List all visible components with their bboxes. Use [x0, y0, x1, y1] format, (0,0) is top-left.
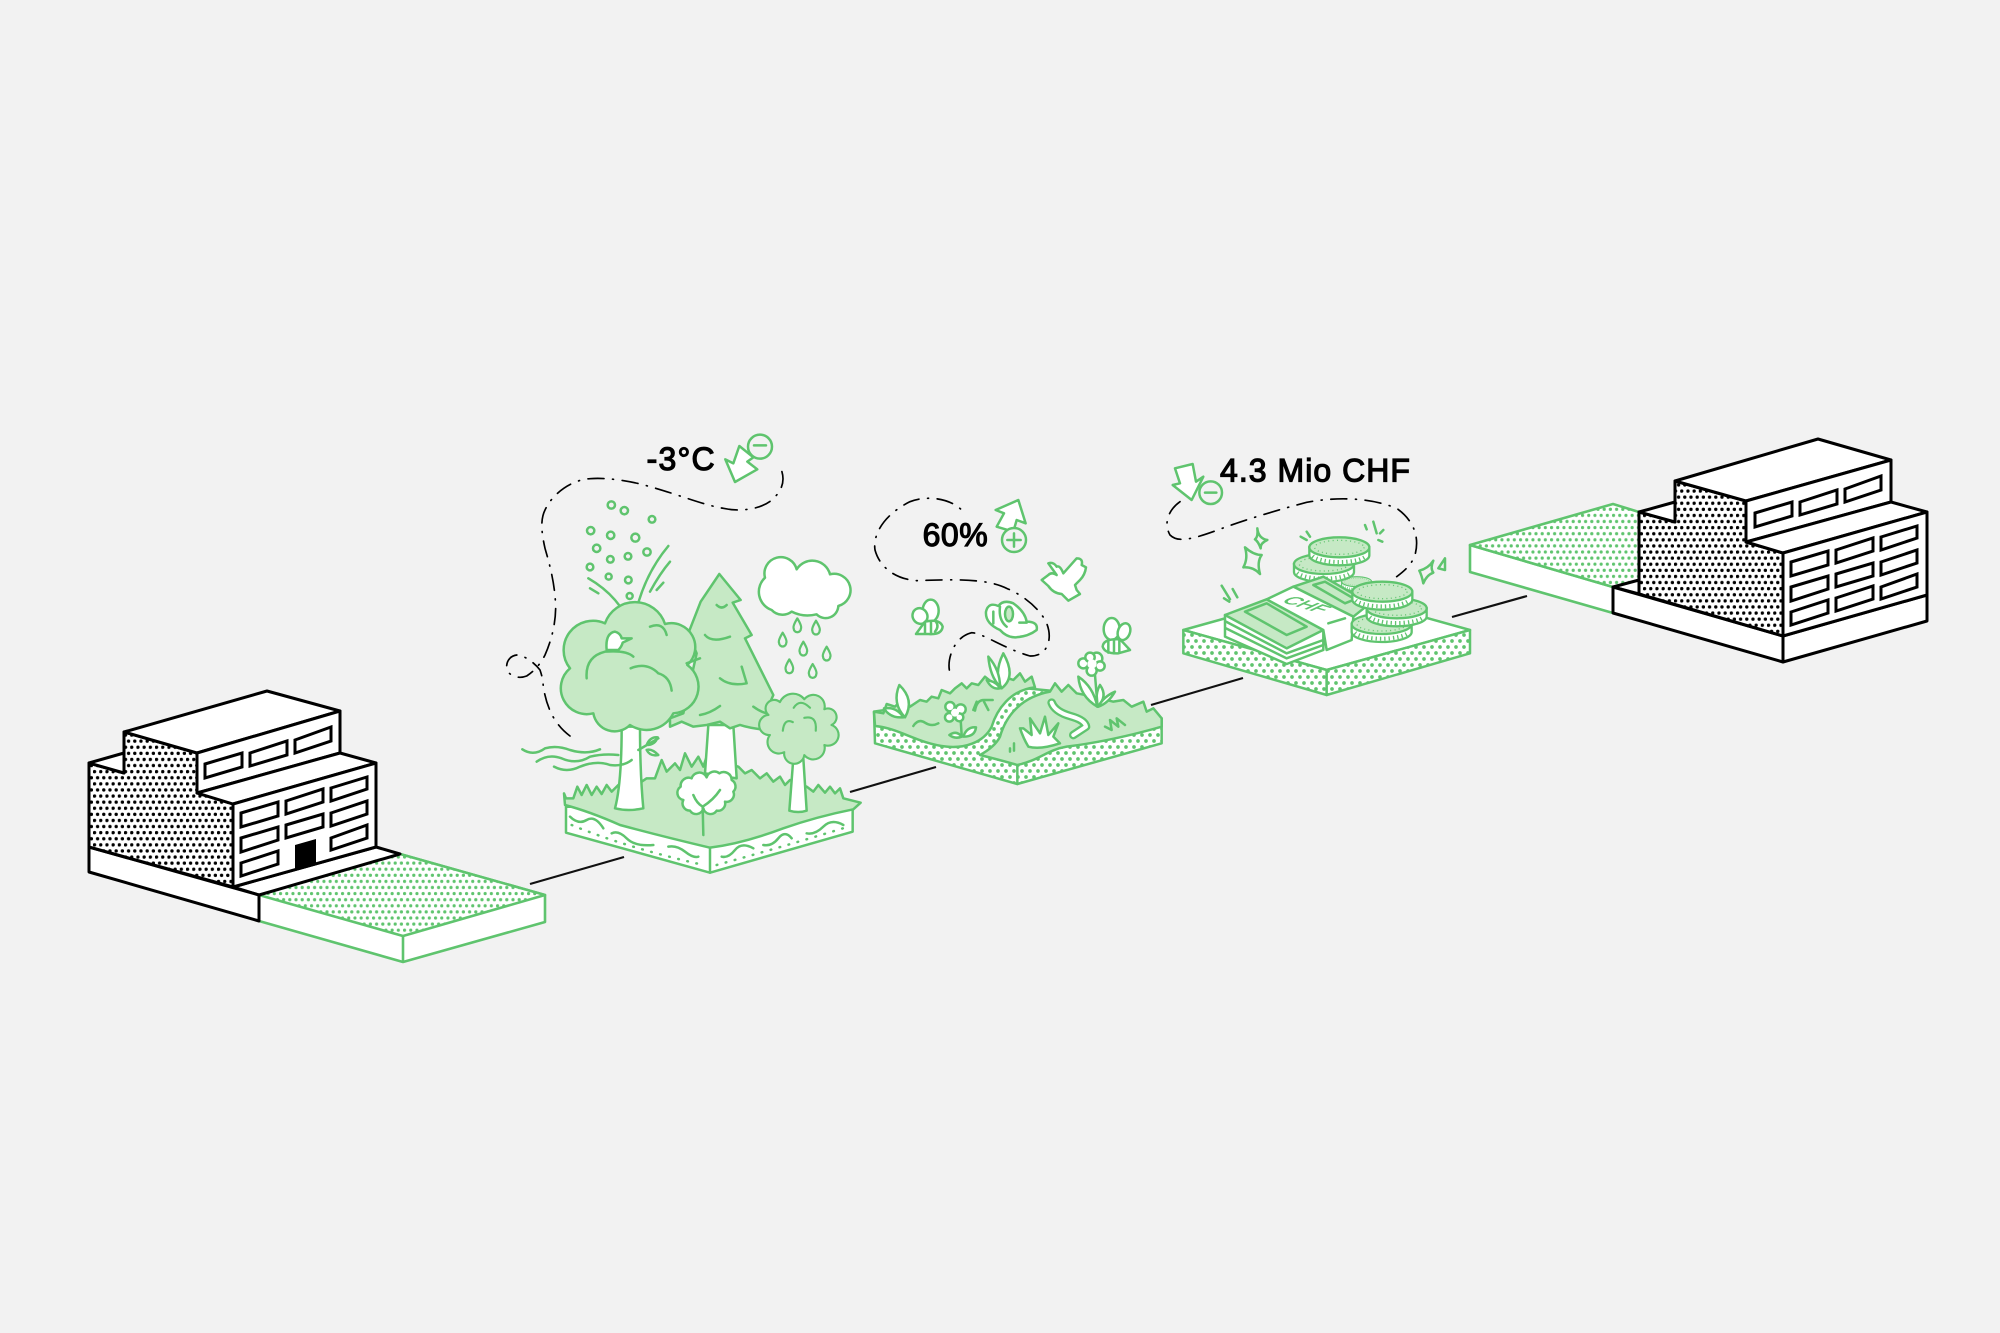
cloud with rain: [759, 557, 851, 678]
seeds and evaporation: [587, 501, 670, 628]
fir tree: [670, 574, 773, 778]
base slab: [1183, 590, 1470, 695]
connector line 1: [530, 857, 624, 884]
bee right: [1103, 618, 1133, 653]
icon: up arrow with plus: [996, 500, 1026, 552]
bee left: [910, 600, 943, 634]
big tree with bird: [522, 602, 700, 810]
butterfly: [986, 602, 1037, 637]
green slab: right: [1470, 504, 1639, 613]
green slab: left: [259, 854, 545, 962]
connector line 3: [1151, 678, 1243, 705]
heading: 4.3 Mio CHF value: 4.3 Mio CHF: [1220, 453, 1410, 489]
building: right: [1613, 439, 1927, 662]
ground tile with stream: [874, 673, 1162, 784]
icon: down arrow with minus: [725, 435, 772, 482]
coins back: [1294, 537, 1372, 591]
ground tile: [564, 753, 861, 873]
sparkles: [1222, 522, 1445, 602]
banknote stack: [1225, 577, 1370, 664]
bird: [1042, 558, 1086, 601]
heading: -3°C value: -3°C: [647, 441, 715, 477]
connector line 4: [1452, 596, 1527, 617]
icon: down arrow with minus: [1173, 464, 1222, 504]
white bush: [677, 772, 736, 835]
left building with green roof slab: [89, 691, 545, 962]
heading: 60% value: 60%: [923, 517, 988, 553]
tile 1: trees, cooling effect: [507, 435, 861, 873]
small tree: [759, 694, 839, 812]
CHF band label: CHF: [1276, 595, 1335, 615]
dashed loop 3: [1167, 499, 1417, 577]
tile 2: biodiversity: [874, 498, 1162, 784]
tile 3: money savings: [1167, 453, 1470, 695]
connector line 2: [850, 767, 936, 792]
dashed loop 1: [507, 467, 783, 736]
right building with green slab: [1470, 439, 1927, 662]
plants and flowers: [884, 653, 1115, 748]
dashed loop 2: [875, 498, 1049, 670]
building: left: [89, 691, 400, 921]
coins front: [1352, 582, 1427, 642]
